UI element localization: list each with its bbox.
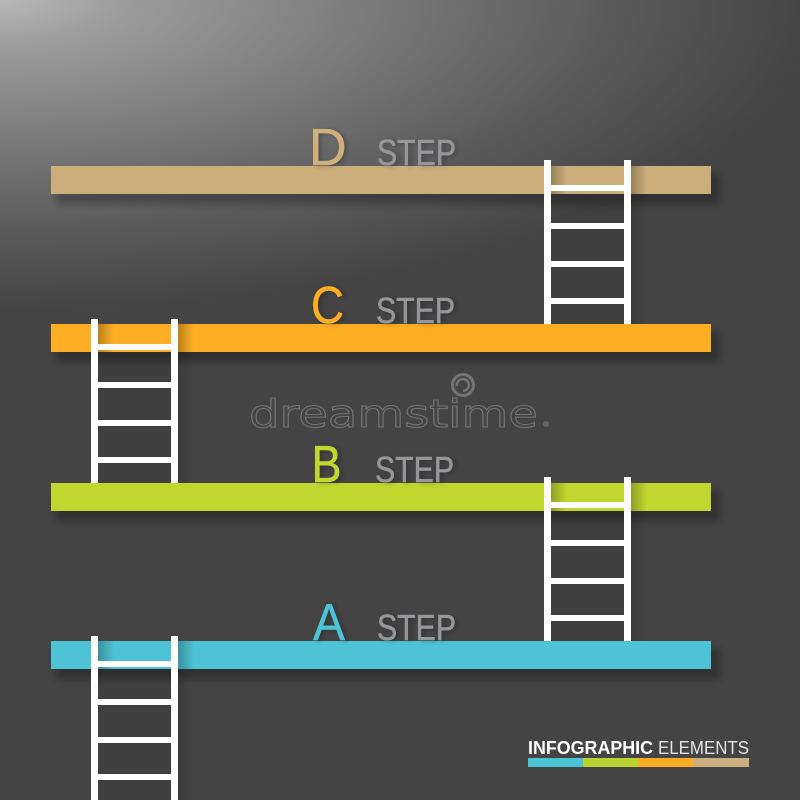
legend title: ELEMENTS [658,738,749,758]
legend colour strip [528,758,749,767]
letter B: B [312,436,342,494]
bar shadow A [56,649,720,679]
legend: infographic elements [528,738,749,767]
ladder B [544,477,647,641]
label: STEP: STEP [377,607,456,648]
ladder C [91,319,194,483]
bar D [51,166,711,194]
label: STEP: STEP [377,132,456,173]
panel: step B [51,436,720,641]
watermark: dreamstime: dreamstime [249,392,538,436]
bar shadow D [56,174,720,204]
label: STEP: STEP [376,290,455,331]
label: STEP: STEP [375,449,454,490]
legend title [528,738,749,758]
bar B [51,483,711,511]
legend title: INFOGRAPHIC [528,738,653,758]
ladder D [544,160,647,324]
bar A [51,641,711,669]
letter D: D [309,119,347,177]
panel: step A [51,594,720,800]
bar shadow C [56,332,720,362]
watermark: dreamstime [249,374,549,436]
panel: step D [51,119,720,324]
panel: step C [51,277,720,483]
letter A: A [313,594,345,652]
ladder A [91,636,194,800]
bar C [51,324,711,352]
letter C: C [311,277,344,335]
bar shadow B [56,491,720,521]
